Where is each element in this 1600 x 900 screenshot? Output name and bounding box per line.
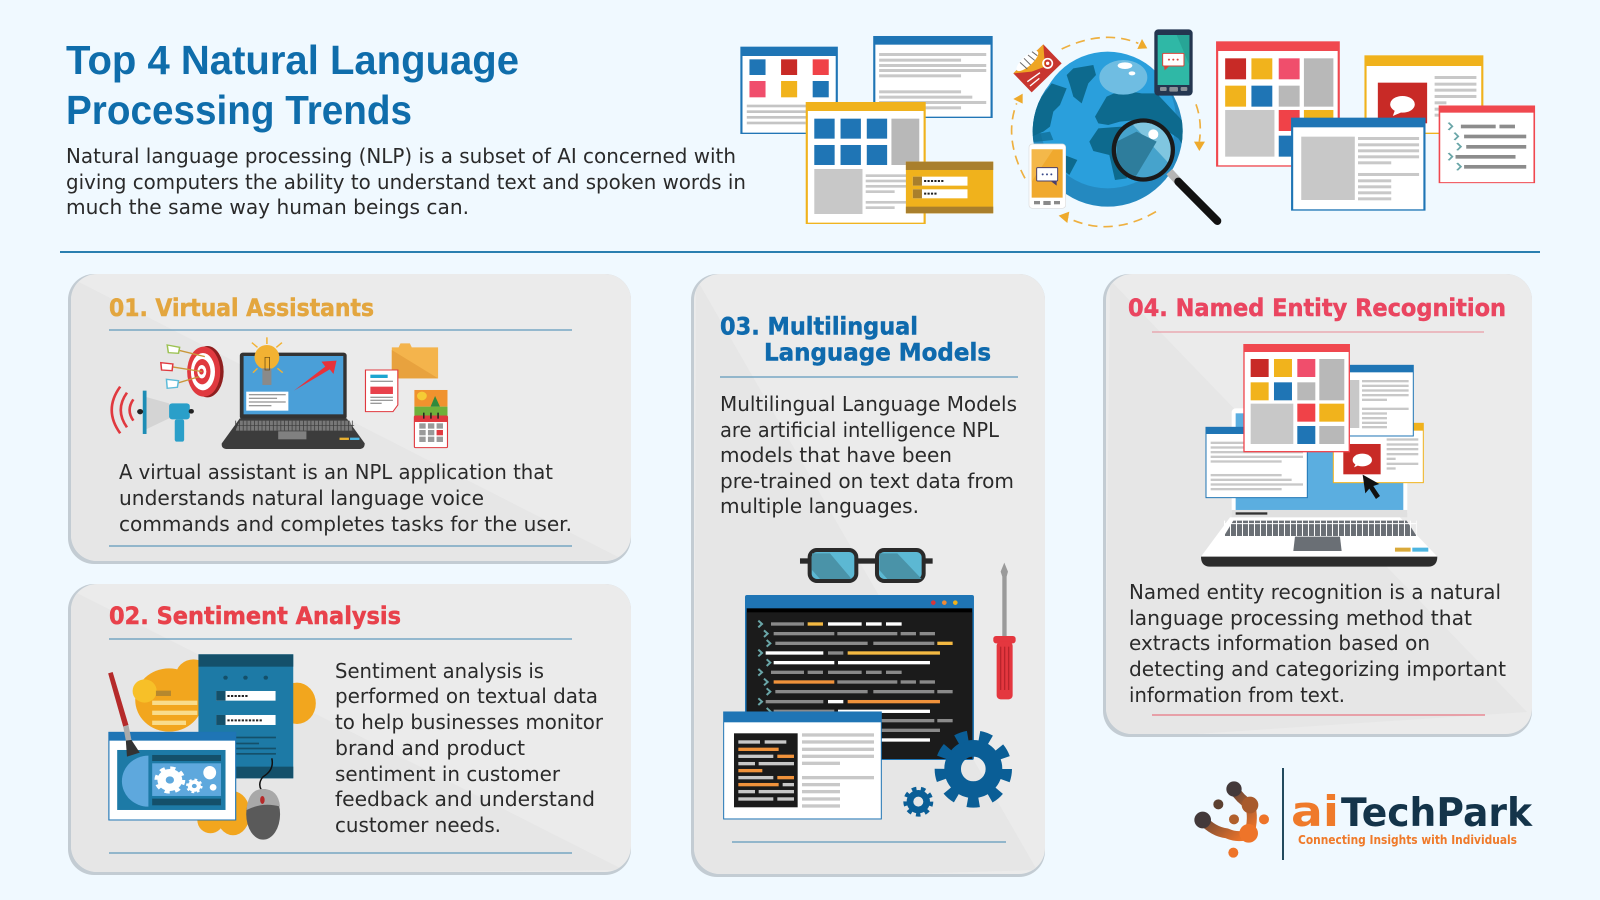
body text: 03	[720, 392, 1017, 518]
icon: paint brush	[108, 672, 140, 757]
window: red list	[1439, 106, 1534, 183]
icon: laptop	[222, 353, 365, 449]
window: yellow chat	[1333, 423, 1423, 483]
heading: 01: 01. Virtual Assistants	[109, 294, 374, 322]
heading: 03: 03. Multilingual	[720, 312, 918, 340]
title: Top 4 Natural Language	[66, 37, 519, 83]
icon: target with arrows	[161, 345, 224, 397]
logo wordmark: ai	[1291, 787, 1339, 836]
body text: 01: understands natural language voice	[119, 486, 484, 510]
window: blue text	[874, 37, 992, 117]
window: yellow chat	[1366, 56, 1482, 133]
code window	[745, 595, 974, 760]
body text: 03: Multilingual Language Models	[720, 392, 1017, 416]
window: yellow dashboard	[807, 103, 925, 223]
icon: mouse cursor	[1363, 475, 1380, 499]
body text: 04: detecting and categorizing important	[1129, 657, 1506, 681]
header illustration: left web windows	[741, 37, 993, 223]
body text: 02: customer needs.	[335, 813, 501, 837]
icon: light bulb	[252, 337, 283, 385]
icon: white gears	[157, 769, 201, 792]
icon: email envelope	[1013, 44, 1062, 92]
icon: computer mouse	[246, 758, 280, 840]
icon: calendar	[414, 413, 447, 448]
body text: 03: multiple languages.	[720, 494, 919, 518]
logo mark	[1194, 781, 1269, 858]
body text: 02: to help businesses monitor	[335, 710, 604, 734]
body text: 02: performed on textual data	[335, 684, 598, 708]
illustration: laptop with windows	[1201, 345, 1437, 567]
icon: folder	[392, 343, 438, 378]
body text: 03: models that have been	[720, 443, 952, 467]
illustration: code editor	[724, 550, 1016, 819]
panel: 01 virtual assistants	[68, 274, 631, 565]
body text: 01: commands and completes tasks for the user.	[119, 512, 572, 536]
window: blue right	[1340, 365, 1413, 436]
title: Processing Trends	[66, 87, 412, 133]
heading: 04: 04. Named Entity Recognition	[1128, 294, 1506, 322]
intro text: much the same way human beings can.	[66, 195, 469, 219]
icon: megaphone	[112, 387, 194, 442]
body text: 04: extracts information based on	[1129, 631, 1430, 655]
panel: 03 multilingual language models	[691, 274, 1045, 880]
laptop	[1201, 408, 1437, 567]
settings window	[109, 732, 236, 820]
heading: 02: 02. Sentiment Analysis	[109, 602, 401, 630]
login card	[906, 162, 993, 213]
title	[66, 37, 519, 133]
body text: 02: sentiment in customer	[335, 762, 561, 786]
intro text: Natural language processing (NLP) is a subset of AI concerned with	[66, 144, 736, 168]
phone: teal chat	[1154, 29, 1193, 96]
body text: 03: pre-trained on text data from	[720, 469, 1014, 493]
heading: 03: Language Models	[764, 338, 991, 366]
illustration: marketing laptop and icons	[112, 337, 447, 449]
header divider	[60, 251, 1540, 253]
icon: glasses	[800, 550, 933, 581]
body text: 04	[1129, 580, 1506, 707]
orange blobs	[135, 659, 316, 835]
body text: 01	[119, 460, 572, 536]
heading: 03	[720, 312, 991, 366]
intro text: giving computers the ability to understand text and spoken words in	[66, 170, 746, 194]
globe	[1030, 52, 1185, 207]
dashed orbit arrows	[1012, 37, 1200, 227]
icon: large gear	[940, 736, 1007, 802]
body text: 02: Sentiment analysis is	[335, 659, 544, 683]
login form document	[198, 654, 293, 778]
logo wordmark: TechPark	[1341, 791, 1533, 836]
icon: document	[365, 370, 398, 412]
orbit arrow heads	[1013, 39, 1205, 223]
panel: 02 sentiment analysis	[68, 584, 631, 875]
icon: picture	[414, 390, 447, 416]
icon: small gear	[906, 789, 931, 814]
window: red grid	[1244, 345, 1349, 452]
header illustration: globe with search and devices	[1012, 29, 1217, 227]
logo: aiTechPark	[1194, 768, 1533, 860]
body text: 04: information from text.	[1129, 683, 1345, 707]
illustration: website interface	[108, 654, 316, 840]
small code window	[724, 712, 881, 819]
body text: 04: Named entity recognition is a natural	[1129, 580, 1501, 604]
body text: 02	[335, 659, 604, 837]
window: blue article	[1292, 118, 1424, 210]
window: blue grid	[741, 47, 837, 133]
magnifying glass	[1112, 118, 1217, 221]
window: red grid	[1217, 42, 1339, 166]
icon: screwdriver	[993, 563, 1016, 699]
panel: 04 named entity recognition	[1103, 274, 1532, 740]
body text: 03: are artificial intelligence NPL	[720, 418, 1000, 442]
phone: orange chat	[1029, 144, 1066, 208]
body text: 02: feedback and understand	[335, 787, 595, 811]
window: blue left	[1206, 427, 1307, 498]
body text: 02: brand and product	[335, 736, 525, 760]
header illustration: right web windows	[1217, 42, 1534, 210]
body text: 04: language processing method that	[1129, 606, 1472, 630]
body text: 01: A virtual assistant is an NPL application that	[119, 460, 553, 484]
logo tagline: Connecting Insights with Individuals	[1298, 833, 1517, 847]
intro text	[66, 144, 746, 219]
